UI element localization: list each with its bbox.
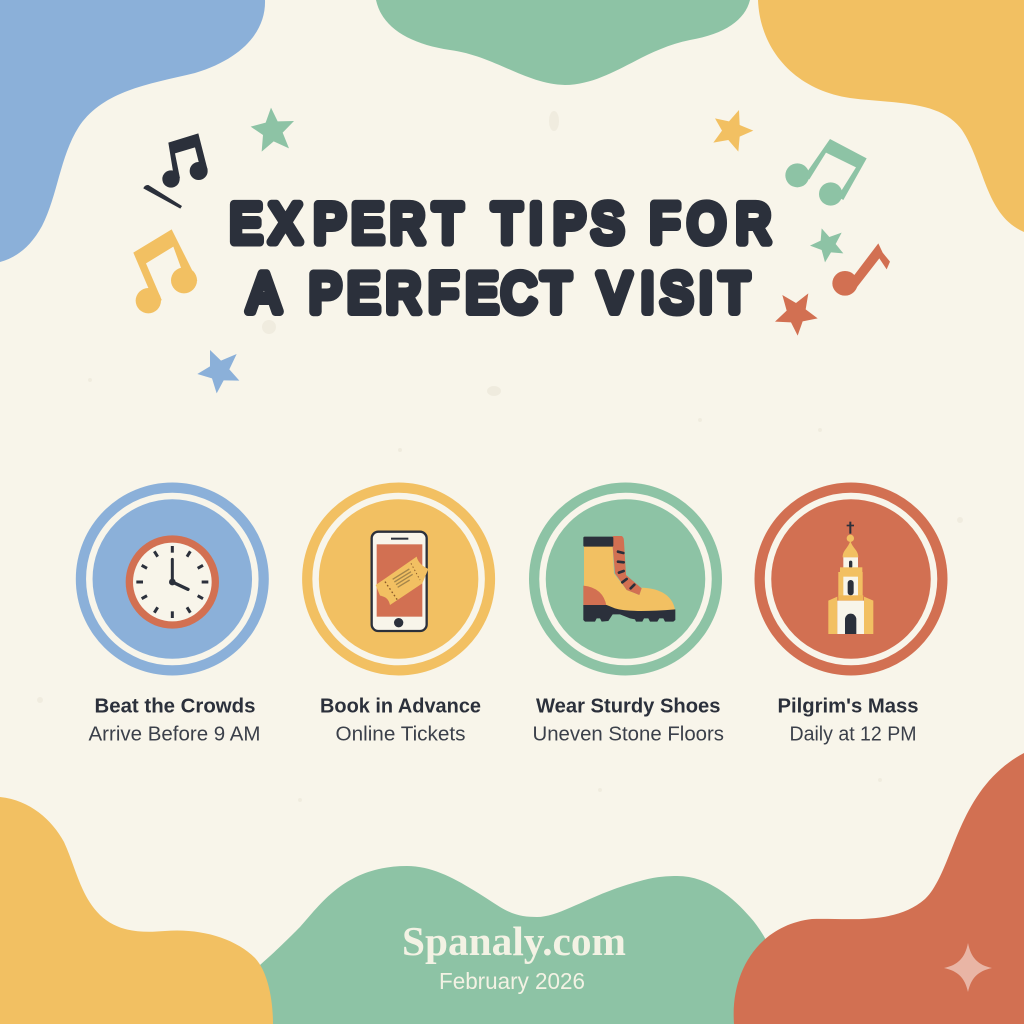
decorations: right notes and stars xyxy=(713,110,890,336)
panel: beat the crowds xyxy=(76,482,269,746)
blob: top left blue xyxy=(0,0,265,262)
subtext: Uneven Stone Floors xyxy=(532,724,724,746)
blob: top center green xyxy=(376,0,750,85)
star: blue xyxy=(197,350,239,393)
footer brand: Spanaly.com xyxy=(402,918,626,964)
star: teal xyxy=(810,228,843,262)
star: green xyxy=(251,108,294,152)
badge: green circle xyxy=(529,482,722,676)
icon: phone with ticket xyxy=(372,532,428,631)
title xyxy=(230,192,771,323)
icon: yellow music note xyxy=(133,229,197,313)
blob: bottom right red xyxy=(734,753,1024,1024)
title: A PERFECT VISIT xyxy=(248,262,749,323)
badge: yellow circle xyxy=(302,482,495,676)
blob: bottom left yellow xyxy=(0,797,273,1024)
star: red xyxy=(775,293,818,336)
icon: clock xyxy=(126,535,219,629)
footer date: February 2026 xyxy=(439,968,585,994)
panel: book in advance xyxy=(302,482,495,746)
panel: pilgrim's mass xyxy=(754,482,948,746)
icon: boot xyxy=(583,536,675,622)
icon: sparkle xyxy=(944,943,992,992)
panel: wear sturdy shoes xyxy=(529,482,724,746)
star: yellow xyxy=(713,110,753,152)
subtext: Daily at 12 PM xyxy=(790,724,916,746)
decorations: left notes and stars xyxy=(133,108,294,393)
icon: church xyxy=(828,522,873,634)
title: EXPERT TIPS FOR xyxy=(230,192,771,254)
heading: Beat the Crowds xyxy=(94,696,256,718)
blob: bottom center green xyxy=(250,866,775,1024)
heading: Wear Sturdy Shoes xyxy=(536,696,720,718)
icon: green music note xyxy=(785,139,867,206)
badge: blue circle xyxy=(76,482,269,676)
heading: Pilgrim's Mass xyxy=(778,696,918,718)
badge: red circle xyxy=(754,482,948,676)
blob: top right yellow xyxy=(758,0,1024,232)
heading: Book in Advance xyxy=(320,696,481,718)
icon: dark music note xyxy=(143,133,208,209)
subtext: Arrive Before 9 AM xyxy=(88,724,260,746)
icon: red music note xyxy=(832,243,890,296)
subtext: Online Tickets xyxy=(336,724,466,746)
